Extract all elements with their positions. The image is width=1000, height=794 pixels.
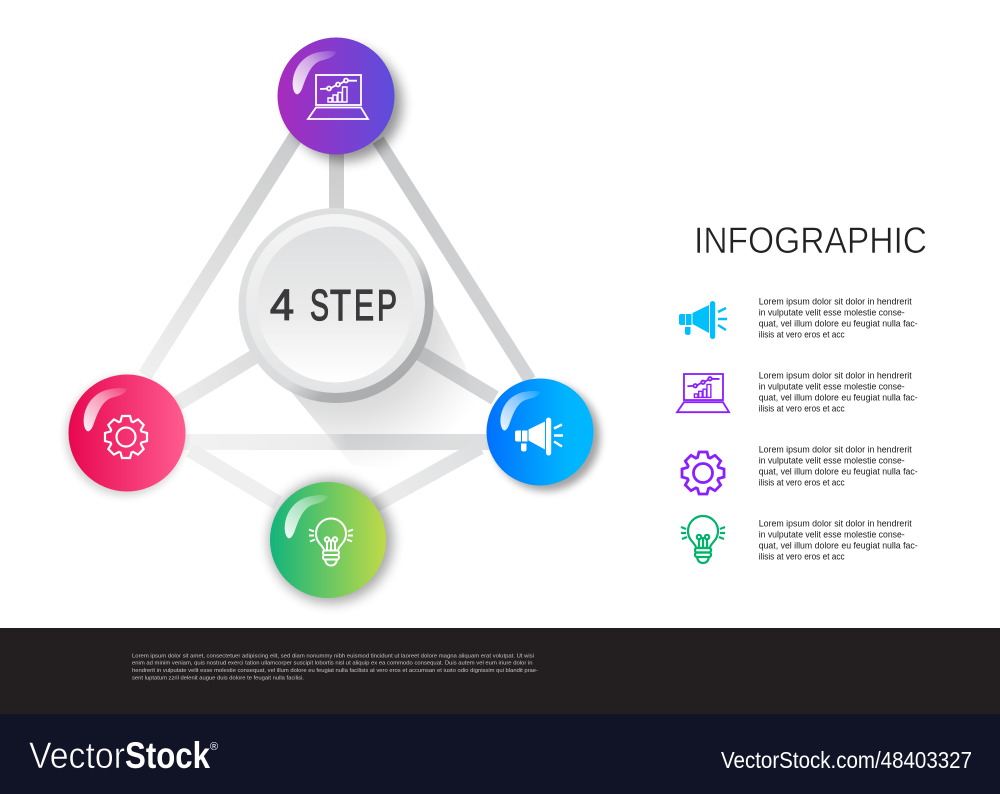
title: INFOGRAPHIC — [694, 220, 927, 261]
node: gear (red) — [65, 374, 186, 496]
text block: in vulputate velit esse molestie conse- — [759, 381, 905, 392]
text block — [759, 518, 918, 562]
centre label: E — [354, 281, 374, 330]
icon: purple gear — [682, 452, 724, 494]
text block: ilisis at vero eros et acc — [759, 551, 845, 562]
brand logo text: Vector — [29, 735, 125, 776]
node: megaphone (blue) — [486, 378, 600, 491]
centre label: 4 — [270, 281, 294, 330]
watermark footer — [0, 714, 1000, 794]
centre label: P — [377, 281, 397, 330]
cast shadow of centre disc — [273, 297, 490, 478]
dark info band — [0, 628, 1000, 714]
icon: light bulb — [309, 518, 353, 566]
brand logo text: Stock — [125, 735, 210, 776]
icon: purple laptop — [677, 374, 729, 412]
text block: Lorem ipsum dolor sit dolor in hendrerit — [759, 444, 912, 455]
icon: gear — [105, 416, 147, 458]
brand logo text — [29, 735, 218, 776]
legend row 4: light bulb — [681, 516, 918, 563]
legend row 2: laptop — [677, 370, 918, 414]
connector lines — [145, 130, 530, 505]
text block: quat, vel illum dolore eu feugiat nulla fac- — [759, 392, 918, 403]
text block — [759, 296, 918, 340]
text block: Lorem ipsum dolor sit dolor in hendrerit — [759, 518, 912, 529]
band paragraph: sent luptatum zzril delenit augue duis dolore te feugait nulla facilisi. — [132, 675, 304, 681]
centre label: T — [330, 281, 351, 330]
centre disc: 4 STEP — [238, 208, 434, 403]
icon: laptop chart — [308, 75, 368, 119]
text block: Lorem ipsum dolor sit dolor in hendrerit — [759, 296, 912, 307]
text block: quat, vel illum dolore eu feugiat nulla fac- — [759, 466, 918, 477]
text block — [759, 370, 918, 414]
band paragraph — [132, 653, 538, 681]
image id url: VectorStock.com/48403327 — [721, 747, 972, 773]
icon: green light bulb — [681, 516, 725, 563]
legend row 1: megaphone — [679, 296, 918, 340]
text block: ilisis at vero eros et acc — [759, 403, 845, 414]
text block — [759, 444, 918, 488]
legend row 3: gear — [682, 444, 918, 494]
text block: quat, vel illum dolore eu feugiat nulla fac- — [759, 318, 918, 329]
text block: quat, vel illum dolore eu feugiat nulla fac- — [759, 540, 918, 551]
node: light bulb (green) — [269, 479, 393, 603]
band paragraph: enim ad minim veniam, quis nostrud exerci tation ullamcorper suscipit lobortis nisl ut aliquip ex ea commodo consequat. Duis autem vel eum iriure dolor in — [132, 661, 533, 667]
band paragraph: hendrerit in vulputate velit esse molestie consequat, vel illum dolore eu feugiat nulla facilisis at vero eros et accumsan et iusto odio dignissim qui blandit prae- — [132, 668, 538, 674]
text block: ilisis at vero eros et acc — [759, 329, 845, 340]
brand logo text: ® — [210, 741, 218, 753]
centre label — [270, 281, 397, 330]
node: laptop (purple) — [278, 38, 402, 161]
text block: in vulputate velit esse molestie conse- — [759, 307, 905, 318]
text block: Lorem ipsum dolor sit dolor in hendrerit — [759, 370, 912, 381]
band paragraph: Lorem ipsum dolor sit amet, consectetuer adipiscing elit, sed diam nonummy nibh euismod tincidunt ut laoreet dolore magna aliquam erat volutpat. Ut wisi — [132, 653, 534, 659]
icon: cyan megaphone — [679, 301, 727, 339]
text block: ilisis at vero eros et acc — [759, 477, 845, 488]
icon: megaphone — [515, 418, 563, 456]
text block: in vulputate velit esse molestie conse- — [759, 455, 905, 466]
centre label: S — [310, 281, 329, 330]
text block: in vulputate velit esse molestie conse- — [759, 529, 905, 540]
